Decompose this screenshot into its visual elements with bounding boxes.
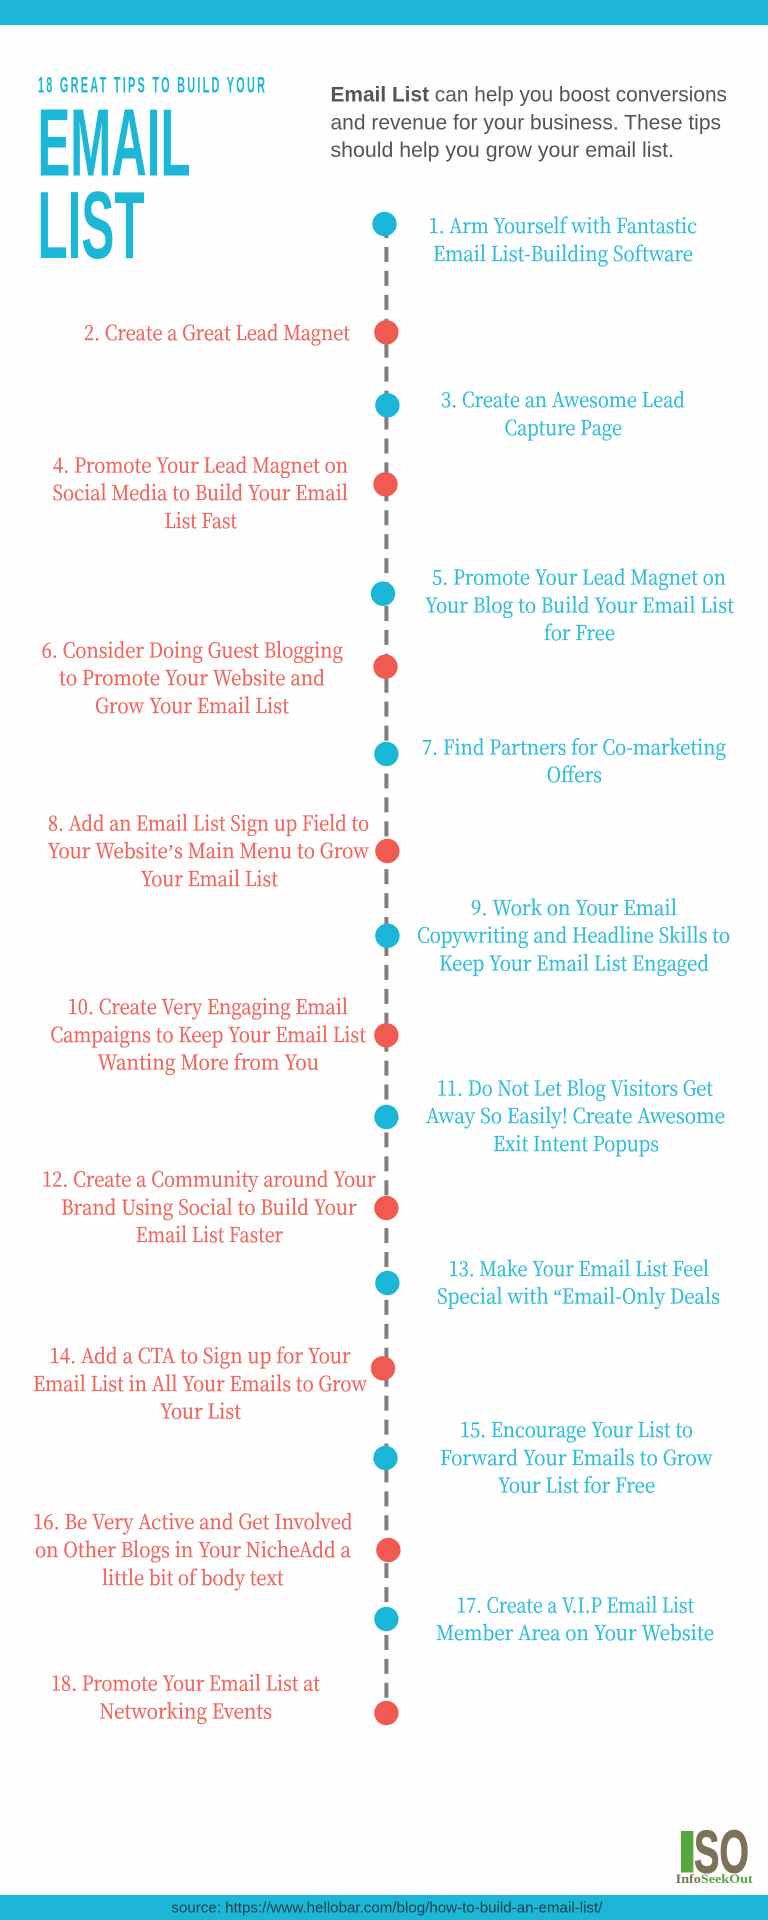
marker 1	[372, 212, 397, 236]
tip 8	[48, 807, 400, 892]
tip 6 text	[42, 634, 343, 719]
tip 3 text: Capture Page	[504, 411, 622, 441]
tip 12 text: Email List Faster	[136, 1218, 283, 1248]
tip 17 text: Member Area on Your Website	[436, 1616, 714, 1646]
tip 15 text	[440, 1413, 713, 1499]
tip 18 text	[51, 1667, 320, 1725]
tip 9	[375, 891, 730, 977]
title line: LIST: LIST	[38, 172, 144, 279]
marker 12	[374, 1196, 399, 1220]
marker 3	[375, 393, 400, 417]
marker 13	[375, 1271, 400, 1295]
subtitle: 18 GREAT TIPS TO BUILD YOUR	[38, 72, 265, 97]
marker 7	[374, 742, 399, 766]
tip 10 text: Wanting More from You	[98, 1046, 319, 1076]
tip 10 text: 10. Create Very Engaging Email	[68, 990, 348, 1020]
top banner	[0, 0, 768, 25]
tip 13 text: 13. Make Your Email List Feel	[449, 1252, 709, 1282]
tip 7 text: 7. Find Partners for Co-marketing	[422, 731, 726, 761]
tip 12 text: Brand Using Social to Build Your	[61, 1191, 357, 1221]
tip 10 text: Campaigns to Keep Your Email List	[50, 1018, 366, 1048]
tip 17 text	[436, 1589, 714, 1646]
tip 7	[374, 731, 726, 788]
tip 18 text: Networking Events	[99, 1695, 272, 1725]
intro paragraph: Email List can help you boost conversions	[330, 83, 727, 107]
intro paragraph: and revenue for your business. These tips	[330, 110, 721, 134]
tip 1	[372, 209, 697, 267]
tip 13	[375, 1252, 720, 1310]
tip 8 text: 8. Add an Email List Sign up Field to	[48, 807, 369, 837]
tip 6 text: to Promote Your Website and	[59, 661, 325, 691]
marker 10	[374, 1023, 399, 1048]
intro paragraph: should help you grow your email list.	[330, 138, 674, 162]
tip 11 text: Exit Intent Popups	[493, 1127, 659, 1157]
tip 4 text: Social Media to Build Your Email	[52, 476, 348, 506]
tip 16 text	[33, 1505, 353, 1591]
tip 9 text: Copywriting and Headline Skills to	[417, 919, 730, 949]
marker 9	[375, 924, 400, 948]
tip 16 text: little bit of body text	[102, 1561, 284, 1591]
tip 18 text: 18. Promote Your Email List at	[51, 1667, 320, 1697]
tip 5 text: for Free	[544, 616, 615, 646]
tip 17 text: 17. Create a V.I.P Email List	[456, 1589, 694, 1619]
marker 2	[374, 320, 399, 344]
tip 1 text: 1. Arm Yourself with Fantastic	[429, 209, 697, 239]
tip 5 text	[425, 561, 734, 646]
marker 18	[374, 1701, 399, 1725]
marker 6	[373, 654, 398, 679]
tip 14	[33, 1339, 395, 1425]
marker 4	[373, 472, 398, 496]
tip 5 text: 5. Promote Your Lead Magnet on	[432, 561, 726, 591]
tip 12	[42, 1163, 399, 1248]
title line: EMAIL: EMAIL	[38, 89, 190, 196]
tip 1 text	[429, 209, 697, 267]
tip 4 text: List Fast	[164, 504, 237, 534]
tip 2	[84, 316, 399, 346]
tip 4	[52, 448, 398, 534]
marker 16	[376, 1538, 401, 1562]
marker 15	[373, 1446, 398, 1470]
tip 14 text: Your List	[160, 1395, 241, 1425]
tip 4 text	[52, 448, 348, 534]
logo mark: I	[675, 1819, 699, 1886]
tip 9 text: Keep Your Email List Engaged	[439, 947, 709, 977]
tip 15 text: Forward Your Emails to Grow	[440, 1441, 713, 1471]
tip 18	[51, 1667, 399, 1725]
logo wordmark: InfoSeekOut	[676, 1871, 753, 1886]
tip 16 text: on Other Blogs in Your NicheAdd a	[35, 1533, 352, 1563]
tip 5 text: Your Blog to Build Your Email List	[425, 589, 734, 619]
tip 12 text: 12. Create a Community around Your	[42, 1163, 376, 1193]
tip 16	[33, 1505, 401, 1591]
tip 3	[375, 383, 685, 441]
tip 15	[373, 1413, 713, 1499]
tip 14 text	[33, 1339, 368, 1425]
tip 6 text: 6. Consider Doing Guest Blogging	[42, 634, 343, 664]
footer bar	[0, 1895, 768, 1920]
tip 15 text: Your List for Free	[498, 1469, 655, 1499]
dashed timeline	[384, 223, 388, 1700]
logo: InfoSeekOut	[675, 1818, 753, 1886]
tip 10	[50, 990, 399, 1076]
tip 2 text: 2. Create a Great Lead Magnet	[84, 316, 350, 346]
marker 8	[375, 839, 400, 863]
source line: source: https://www.hellobar.com/blog/how-to-build-an-email-list/	[171, 1900, 603, 1916]
tip 8 text: Your Email List	[141, 862, 278, 892]
tip 13 text	[437, 1252, 720, 1310]
tip 8 text	[48, 807, 370, 892]
tip 11 text: Away So Easily! Create Awesome	[426, 1099, 725, 1129]
tip 5	[371, 561, 734, 646]
tip 6 text: Grow Your Email List	[95, 689, 289, 719]
tip 16 text: 16. Be Very Active and Get Involved	[33, 1505, 353, 1535]
marker 11	[374, 1105, 399, 1129]
tip 10 text	[50, 990, 366, 1076]
marker 17	[374, 1607, 399, 1631]
tip 8 text: Your Website’s Main Menu to Grow	[48, 834, 370, 864]
tip 11	[374, 1072, 725, 1157]
tip 13 text: Special with “Email-Only Deals	[437, 1280, 720, 1310]
tip 7 text	[422, 731, 726, 788]
tip 9 text	[417, 891, 730, 977]
tip 6	[42, 634, 398, 719]
tip 4 text: 4. Promote Your Lead Magnet on	[53, 448, 348, 478]
tip 15 text: 15. Encourage Your List to	[460, 1413, 693, 1443]
logo mark	[675, 1818, 749, 1886]
tip 3 text: 3. Create an Awesome Lead	[441, 383, 685, 413]
title block	[38, 72, 265, 279]
tip 1 text: Email List-Building Software	[433, 237, 693, 267]
tip 11 text: 11. Do Not Let Blog Visitors Get	[437, 1072, 713, 1102]
tip 17	[374, 1589, 714, 1646]
intro paragraph	[330, 83, 727, 162]
tip 12 text	[42, 1163, 376, 1248]
marker 5	[371, 582, 395, 606]
marker 14	[371, 1356, 395, 1381]
tip 9 text: 9. Work on Your Email	[471, 891, 677, 921]
tip 14 text: Email List in All Your Emails to Grow	[33, 1367, 368, 1397]
tip 7 text: Offers	[547, 758, 602, 788]
tip 3 text	[441, 383, 685, 441]
tip 11 text	[426, 1072, 725, 1157]
tip 14 text: 14. Add a CTA to Sign up for Your	[50, 1339, 351, 1369]
